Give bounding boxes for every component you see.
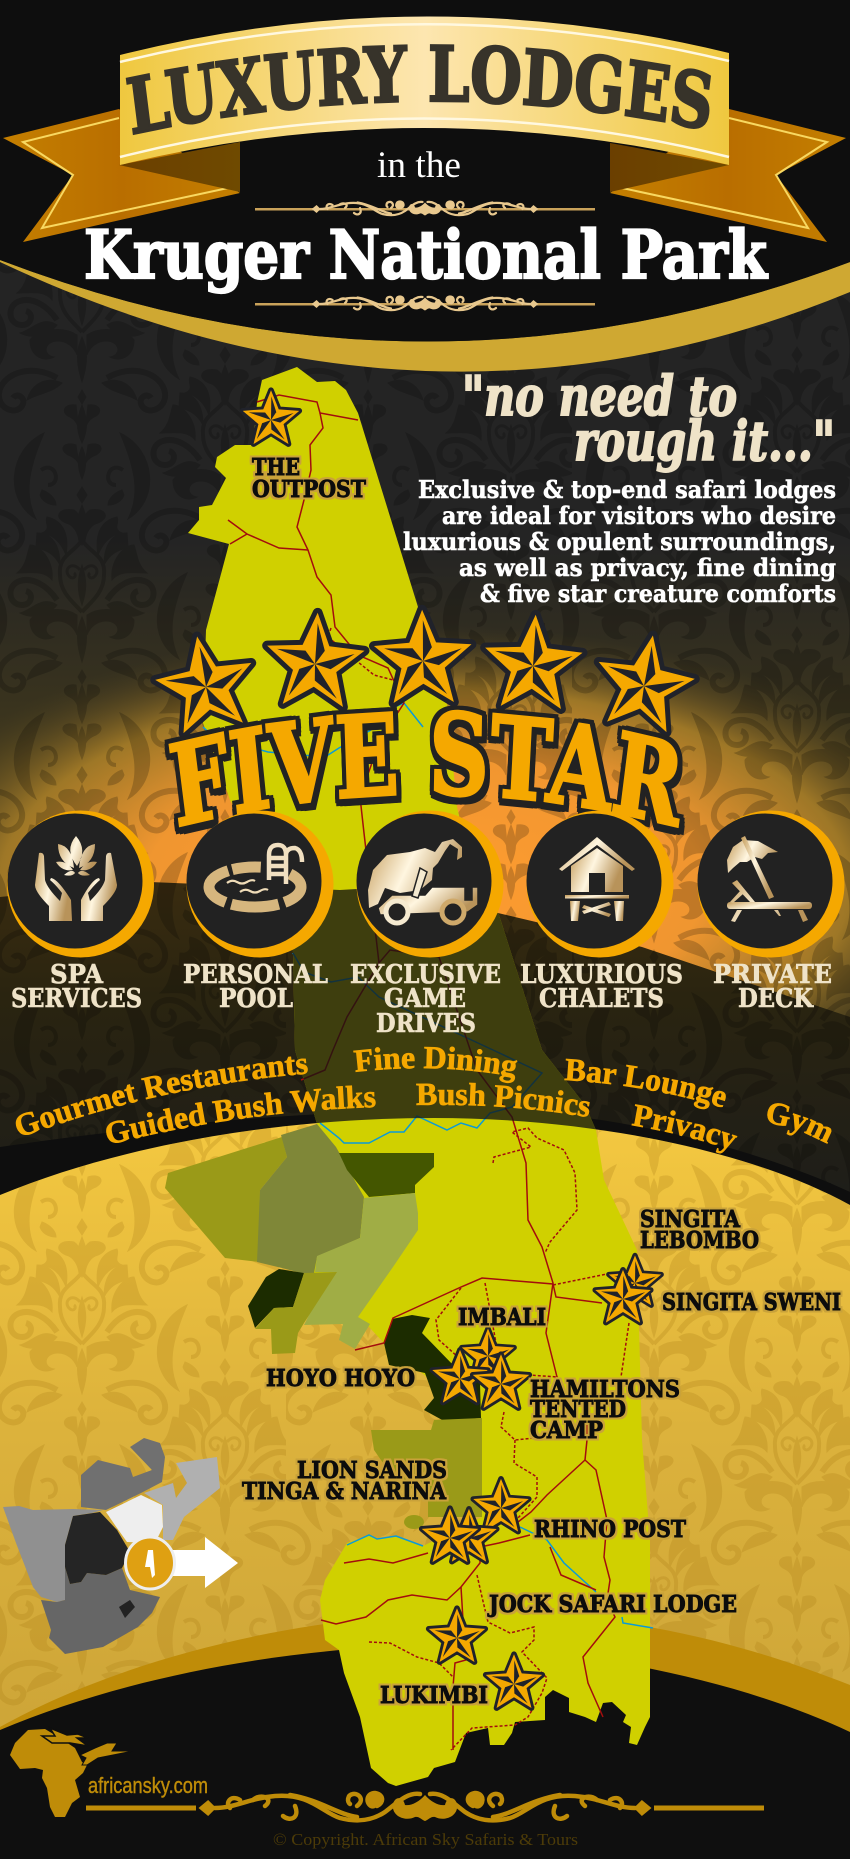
amenities curved list: Privacy xyxy=(632,1104,738,1154)
heading: Five Star: FIVE STAR xyxy=(164,706,685,836)
label: Lion Sands: TINGA & NARINA xyxy=(242,1478,447,1505)
label: Hoyo Hoyo: HOYO HOYO xyxy=(266,1365,415,1392)
dark damask background xyxy=(0,250,850,1140)
locator lens xyxy=(126,1537,174,1589)
rivers xyxy=(203,703,653,1628)
star: Lukimbi xyxy=(486,1654,542,1708)
caption labels: GAME xyxy=(384,984,466,1014)
map: Kruger National Park xyxy=(165,367,653,1786)
badge: luxurious chalets xyxy=(526,810,674,958)
logo: Africa and planes xyxy=(10,1728,133,1817)
main roads xyxy=(228,395,615,1750)
footer ornament xyxy=(86,1793,764,1821)
badge: spa services xyxy=(7,810,154,958)
icon: hands and lotus xyxy=(35,836,117,921)
label: Hamiltons Tented Camp xyxy=(530,1376,680,1444)
intro paragraph: as well as privacy, fine dining xyxy=(459,553,836,582)
badge: private deck xyxy=(698,810,844,958)
caption labels: DECK xyxy=(738,984,814,1014)
title: Luxury Lodges: LUXURY LODGES xyxy=(126,44,711,136)
star: Imbali xyxy=(462,1328,514,1378)
caption labels: PERSONAL xyxy=(183,960,328,990)
caption labels: PRIVATE xyxy=(713,960,832,990)
ornament top xyxy=(255,202,595,216)
dark hill xyxy=(0,882,850,1210)
star: Hamiltons xyxy=(473,1354,529,1408)
label: Singita Lebombo xyxy=(640,1206,759,1254)
label: Lion Sands: LION SANDS xyxy=(297,1457,447,1484)
star: Rhino Post xyxy=(473,1479,529,1532)
ornament lower xyxy=(255,296,595,310)
dotted roads xyxy=(328,628,629,1750)
label: The Outpost: THE xyxy=(252,454,300,481)
caption labels xyxy=(11,960,832,1039)
locator map of southern Africa xyxy=(3,1438,220,1654)
caption labels: SPA xyxy=(50,960,104,990)
star: Singita Sweni xyxy=(595,1270,651,1323)
star: Singita Lebombo xyxy=(609,1255,661,1305)
label: Hamiltons Tented Camp: TENTED xyxy=(530,1396,626,1423)
caption labels: POOL xyxy=(219,984,293,1014)
footer black xyxy=(0,1645,850,1859)
copyright: © Copyright. African Sky Safaris & Tours xyxy=(273,1830,578,1849)
caption labels: EXCLUSIVE xyxy=(350,960,501,990)
amenities curved list: Bar Lounge xyxy=(564,1058,726,1110)
caption labels: DRIVES xyxy=(376,1009,476,1039)
star: Jock xyxy=(429,1608,485,1662)
ribbon: main banner xyxy=(120,16,729,165)
header curve gold band xyxy=(0,260,850,372)
five big stars xyxy=(149,609,701,736)
header background xyxy=(0,0,850,380)
amenities curved list: Gourmet Restaurants xyxy=(16,1056,308,1135)
intro paragraph xyxy=(403,475,836,608)
badge: exclusive game drives xyxy=(356,810,504,958)
map shade under hill xyxy=(292,889,596,1130)
icon: pool xyxy=(209,845,302,907)
icon: umbrella lounger xyxy=(727,836,812,922)
star: Tinga xyxy=(422,1508,478,1562)
amenities curved list: Bush Picnics xyxy=(416,1082,590,1117)
caption labels: LUXURIOUS xyxy=(520,960,683,990)
label: Lion Sands xyxy=(242,1457,447,1505)
icon: chalet xyxy=(559,837,635,921)
ribbon: left tail xyxy=(3,109,240,242)
star: The Outpost xyxy=(243,390,299,444)
quote xyxy=(462,364,835,473)
logo text: africansky.com xyxy=(88,1773,208,1798)
amenities curved list: Guided Bush Walks xyxy=(106,1085,376,1143)
label: The Outpost xyxy=(252,454,366,503)
amenities curved list xyxy=(16,1046,832,1154)
star: Narina xyxy=(441,1509,497,1562)
label: Rhino Post: RHINO POST xyxy=(534,1516,686,1543)
label: Jock Safari Lodge: JOCK SAFARI LODGE xyxy=(487,1591,737,1618)
gold lower background xyxy=(0,1118,850,1760)
amenities curved list: Fine Dining xyxy=(353,1046,518,1084)
quote: "no need to xyxy=(462,364,737,428)
icon: elephant and jeep xyxy=(368,839,478,923)
badge: personal pool xyxy=(186,810,334,958)
label: Hamiltons Tented Camp: HAMILTONS xyxy=(530,1376,680,1403)
label: The Outpost: OUTPOST xyxy=(252,476,366,503)
black crescent band xyxy=(0,1109,850,1260)
star: Hoyo Hoyo xyxy=(432,1350,488,1403)
footer gold arc xyxy=(0,1612,850,1859)
caption labels: SERVICES xyxy=(11,984,142,1014)
label: Singita Lebombo: LEBOMBO xyxy=(640,1227,759,1254)
park concessions xyxy=(165,1124,482,1529)
label: Singita Lebombo: SINGITA xyxy=(640,1206,741,1233)
ribbon: right tail xyxy=(610,109,846,242)
caption labels: CHALETS xyxy=(539,984,664,1014)
amenities curved list: Gym xyxy=(767,1103,832,1144)
label: Lukimbi: LUKIMBI xyxy=(380,1682,488,1709)
header black panel xyxy=(0,0,850,342)
label: Imbali: IMBALI xyxy=(458,1304,546,1331)
subtitle: in the: in the xyxy=(377,145,461,186)
label: Hamiltons Tented Camp: CAMP xyxy=(530,1417,603,1444)
arrow xyxy=(173,1537,238,1588)
